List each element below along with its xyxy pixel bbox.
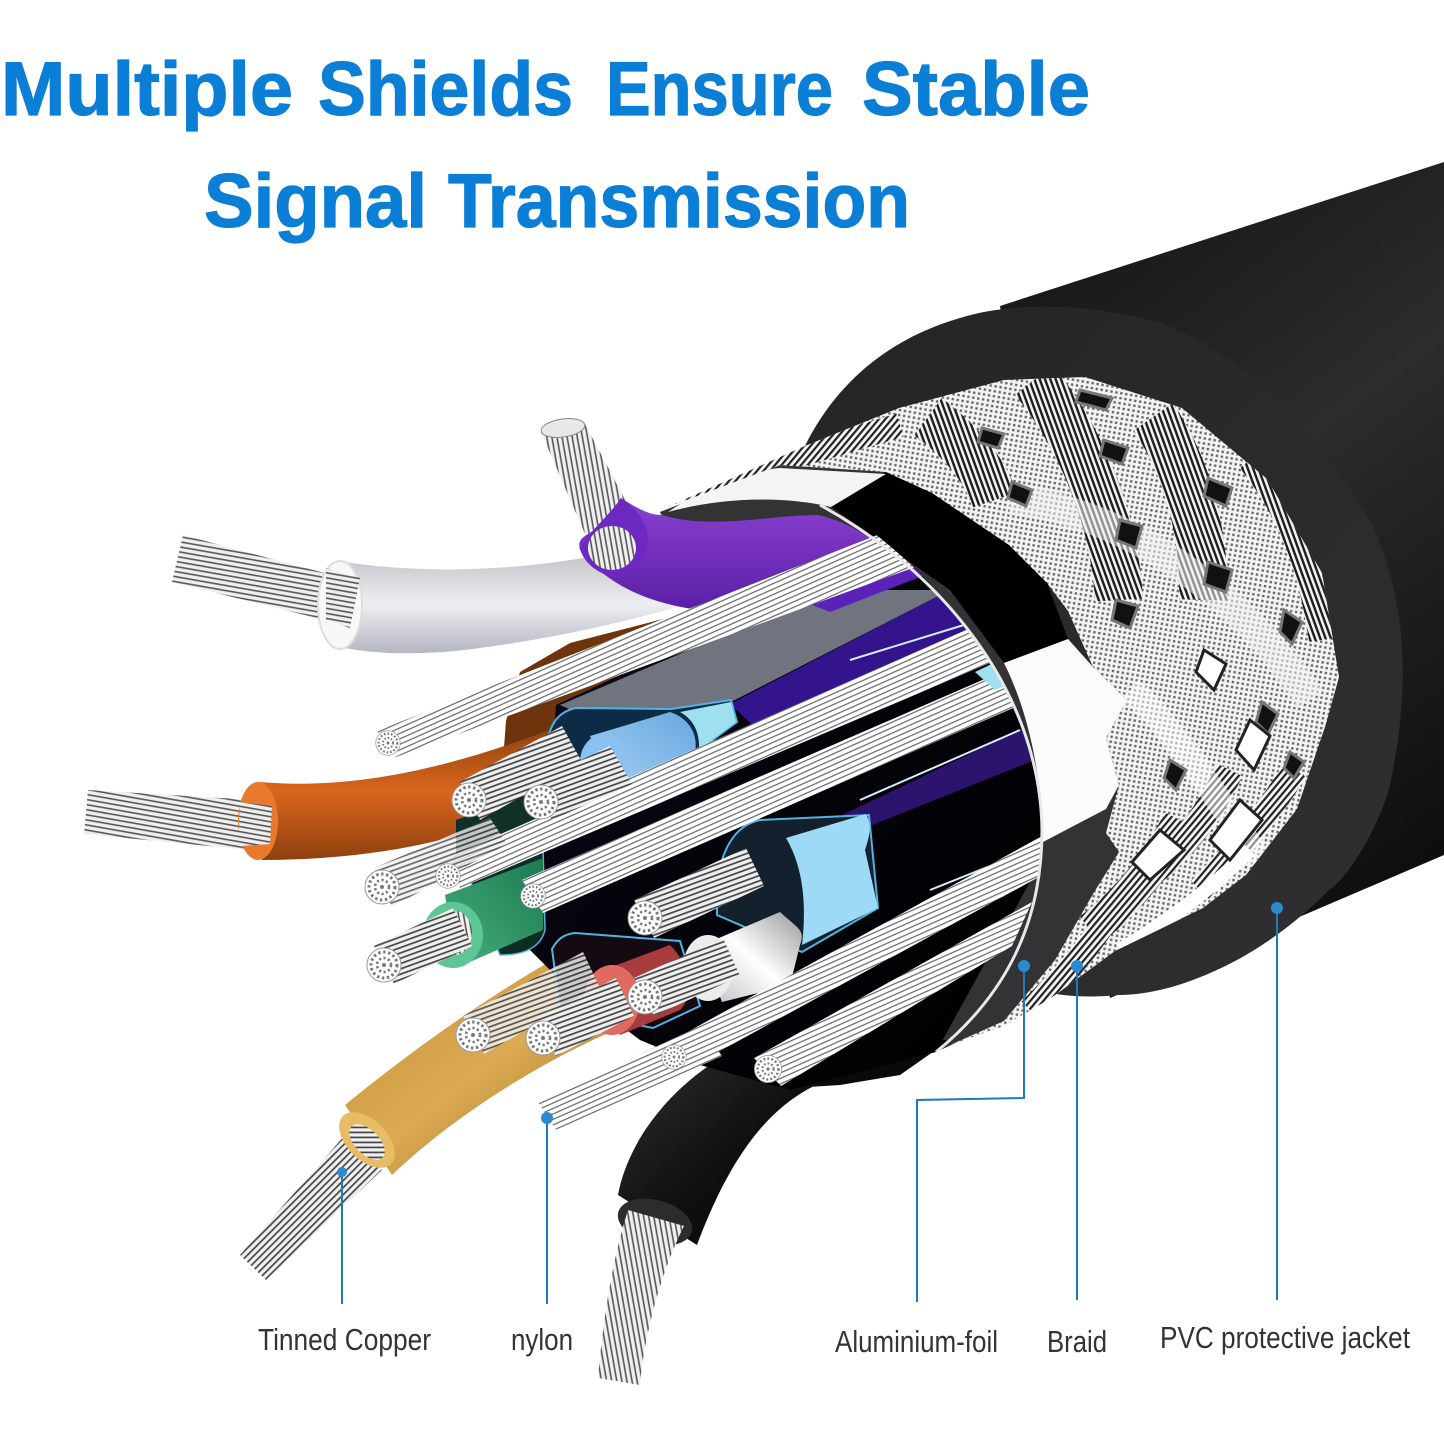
title line 2: Signal	[204, 159, 427, 244]
dark coax interior	[456, 795, 545, 870]
dark conductor	[374, 818, 507, 907]
green end	[423, 902, 483, 968]
white foil upper band	[668, 468, 886, 512]
gold conductor	[240, 1135, 382, 1280]
green shield	[470, 850, 545, 955]
label: Braid	[1047, 1324, 1107, 1359]
foil tip	[975, 664, 1003, 690]
bundle background	[530, 545, 1042, 1090]
orange conductor tip	[238, 802, 272, 846]
strand C	[522, 668, 1027, 913]
orange conductor	[84, 790, 255, 850]
label: Aluminium-foil	[835, 1324, 998, 1359]
strand E	[688, 837, 1040, 1052]
title line 2	[204, 159, 910, 244]
foil under braid	[660, 465, 1127, 1052]
green conductor hole	[454, 911, 472, 955]
strand A	[377, 534, 918, 757]
label: Tinned Copper	[258, 1322, 431, 1357]
shielded strands	[377, 534, 1048, 1130]
braid shield	[650, 360, 1350, 1060]
braid strands	[680, 425, 900, 495]
white end	[683, 935, 733, 1001]
red conductor 2	[534, 978, 634, 1056]
wire: white insulated	[172, 535, 700, 653]
light blue panel	[786, 814, 878, 945]
green coax	[423, 850, 545, 968]
strand D	[538, 1026, 722, 1130]
orange end	[238, 782, 278, 860]
strand F	[754, 902, 1032, 1086]
blue conductor 1	[460, 726, 582, 820]
light streaks	[850, 620, 1030, 890]
leader line	[1076, 966, 1078, 1300]
grey reflection	[560, 590, 940, 709]
foil conductor	[634, 848, 764, 938]
callout: tinned copper	[258, 1167, 431, 1357]
dot	[337, 1167, 347, 1177]
white foil band	[1004, 639, 1127, 842]
gold conductor tip	[343, 1118, 391, 1166]
blue shield outer	[548, 698, 738, 759]
blue conductor 2	[531, 746, 632, 820]
title line 2: Transmission	[448, 159, 910, 244]
purple conductor tip	[588, 526, 636, 570]
dot	[541, 1112, 553, 1124]
white insulation end	[318, 561, 362, 649]
callout: nylon	[511, 1112, 573, 1357]
wire: black	[598, 1030, 950, 1385]
blue coax shield	[548, 698, 738, 778]
red coax	[552, 933, 700, 1035]
black conductor	[598, 1210, 684, 1385]
light blue coax	[683, 814, 878, 1002]
conductor top	[540, 416, 586, 440]
wire: purple	[540, 416, 880, 610]
conductors	[374, 726, 764, 1056]
white conductor tip	[326, 568, 360, 628]
blue insulation	[590, 712, 696, 778]
leader line	[341, 1172, 343, 1304]
black insulation	[618, 1030, 860, 1245]
braid weave	[650, 360, 1350, 1060]
red shield	[552, 933, 700, 1028]
jacket body	[1000, 162, 1444, 998]
green insulation	[445, 858, 543, 968]
black end	[613, 1191, 697, 1253]
title line 1	[1, 47, 1090, 132]
dot	[1271, 902, 1283, 914]
inner bundle	[365, 534, 1048, 1130]
dot	[1018, 960, 1030, 972]
black wedge	[831, 472, 1068, 663]
purple insulation	[579, 498, 880, 610]
white conductor	[634, 938, 740, 1016]
wire: gold	[240, 950, 640, 1280]
gold end	[329, 1102, 405, 1178]
blue end	[580, 738, 596, 760]
title line 1: Shields	[318, 47, 573, 132]
leader line	[1276, 908, 1278, 1300]
white insulation	[718, 912, 802, 1002]
cable jacket	[780, 162, 1444, 1000]
callout: braid	[1047, 960, 1107, 1359]
blue shield tab	[680, 702, 736, 750]
strand ends	[365, 731, 782, 1083]
strand B	[437, 626, 997, 888]
purple reflection lower	[842, 729, 1032, 826]
title line 1: Stable	[862, 47, 1090, 132]
braid gaps	[978, 390, 1304, 790]
orange insulation	[260, 722, 600, 860]
purple reflection	[732, 595, 966, 724]
dot	[1071, 960, 1083, 972]
purple end	[580, 498, 648, 578]
green conductor	[374, 908, 472, 984]
leader line	[917, 966, 1024, 1302]
black back shape	[760, 1040, 950, 1090]
purple reflection top	[812, 562, 922, 612]
gold insulation	[345, 950, 640, 1175]
wire: orange	[84, 612, 760, 860]
leader line	[546, 1118, 548, 1304]
brown back section	[500, 612, 760, 800]
title line 1: Multiple	[1, 47, 293, 132]
label: nylon	[511, 1322, 573, 1357]
red conductor 1	[463, 952, 600, 1054]
title line 1: Ensure	[606, 47, 833, 132]
callout: pvc jacket	[1160, 902, 1410, 1355]
callout: aluminium foil	[835, 960, 1030, 1359]
round wires group	[84, 416, 950, 1385]
white conductor	[172, 535, 358, 625]
braid base	[650, 360, 1350, 1060]
white insulation	[345, 555, 700, 653]
red end	[584, 965, 640, 1035]
light blue shield back	[717, 815, 878, 952]
title	[1, 47, 1090, 244]
bundle rim	[820, 505, 1042, 1052]
purple conductor	[541, 424, 640, 550]
jacket end ring	[780, 307, 1403, 1000]
red insulation	[590, 945, 689, 1035]
